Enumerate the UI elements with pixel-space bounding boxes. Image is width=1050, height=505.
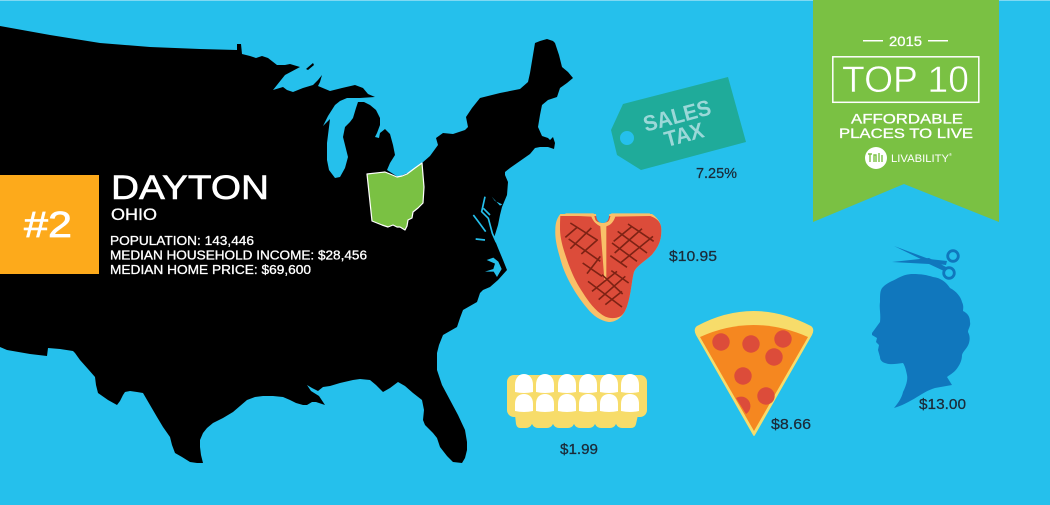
icon: sales tax tag: TAX: [662, 117, 707, 152]
silhouette head: [872, 274, 970, 408]
ribbon banner: Top 10: AFFORDABLE: [851, 110, 963, 126]
icon: pizza slice: [695, 311, 813, 436]
state: Ohio highlighted: [367, 163, 424, 230]
icon: sales tax tag: [611, 77, 746, 170]
icon: silhouette with scissors: [872, 246, 970, 408]
icon: egg carton: [507, 374, 647, 428]
ribbon banner: Top 10: 2015: [889, 34, 922, 49]
ribbon banner: Top 10: PLACES TO LIVE: [839, 125, 973, 141]
map: United States: [0, 26, 573, 463]
price: pizza: $8.66: [771, 416, 811, 433]
price: sales tax: 7.25%: [696, 165, 737, 182]
price: steak: $10.95: [669, 248, 717, 265]
ribbon banner: Top 10: LIVABILITY: [891, 153, 950, 165]
state name: OHIO: [111, 206, 157, 224]
icon: sales tax tag: SALES: [640, 95, 714, 137]
icon: t-bone steak: [555, 213, 661, 322]
median income: MEDIAN HOUSEHOLD INCOME: $28,456: [110, 248, 367, 262]
ribbon banner: Top 10: [813, 0, 999, 222]
price: eggs: $1.99: [560, 441, 598, 458]
ribbon banner: Top 10: ®: [949, 152, 952, 157]
median home price: MEDIAN HOME PRICE: $69,600: [110, 263, 311, 277]
scissors: [892, 246, 958, 278]
price: haircut: $13.00: [919, 396, 966, 413]
city name: DAYTON: [111, 169, 269, 207]
rank badge: [0, 175, 99, 274]
ribbon banner: Top 10: TOP 10: [842, 58, 969, 100]
city details text block: [110, 169, 367, 277]
icon: Livability logo: [865, 147, 887, 169]
population: POPULATION: 143,446: [110, 234, 254, 248]
rank badge: #2: [24, 204, 72, 245]
